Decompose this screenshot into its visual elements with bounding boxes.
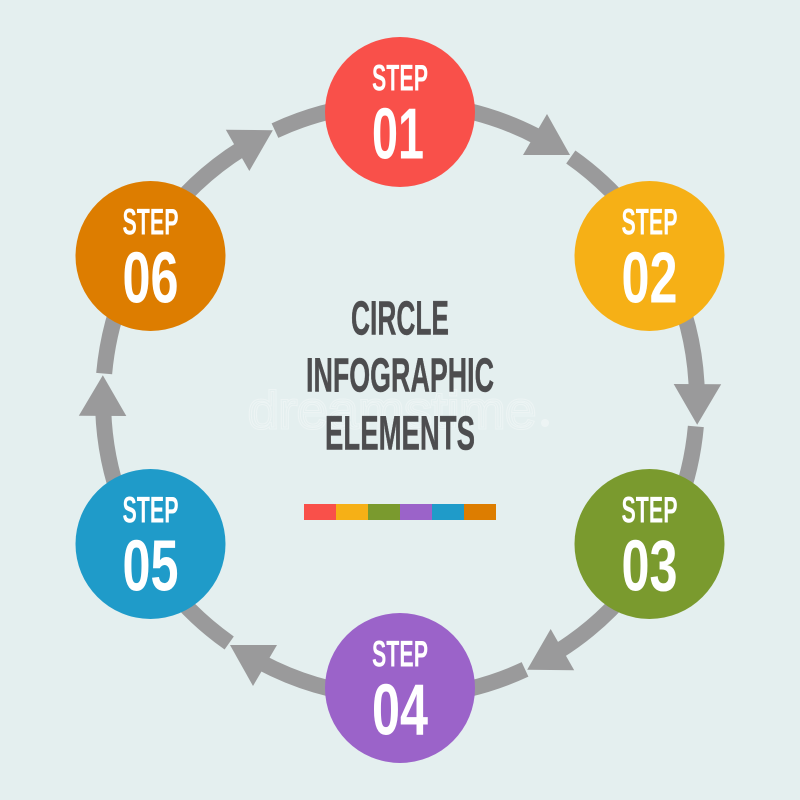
step 05 badge: STEP xyxy=(122,490,178,530)
step 04 badge: STEP xyxy=(372,634,428,674)
title: INFOGRAPHIC xyxy=(306,350,494,402)
step 04 badge: 04 xyxy=(372,670,428,750)
step 03 badge xyxy=(574,469,724,619)
colour legend bar xyxy=(304,504,496,520)
title xyxy=(306,292,494,460)
arrow: step 2 to step 3 xyxy=(561,274,778,526)
step 03 badge: 03 xyxy=(622,526,678,606)
step 03 badge: STEP xyxy=(622,490,678,530)
arrow: step 3 to step 4 xyxy=(426,508,643,759)
arrow: step 1 to step 2 xyxy=(426,104,643,230)
arrow: step 5 to step 6 xyxy=(22,274,239,526)
step 02 badge: STEP xyxy=(622,202,678,242)
arrow: step 4 to step 5 xyxy=(157,570,374,696)
step 05 badge: 05 xyxy=(122,526,178,606)
step 05 badge xyxy=(76,469,226,619)
title: CIRCLE xyxy=(351,292,449,346)
step 01 badge: 01 xyxy=(372,94,424,174)
watermark: dreamstime xyxy=(248,382,536,440)
step 06 badge: STEP xyxy=(122,202,178,242)
watermark: dreamstime xyxy=(248,382,536,440)
step 04 badge xyxy=(325,613,475,763)
step 01 badge xyxy=(325,37,475,187)
arrow: step 6 to step 1 xyxy=(157,41,374,292)
step 06 badge: 06 xyxy=(122,238,178,318)
step 06 badge xyxy=(76,181,226,331)
step 02 badge xyxy=(574,181,724,331)
step 02 badge: 02 xyxy=(622,238,678,318)
title: ELEMENTS xyxy=(325,408,475,460)
step 01 badge: STEP xyxy=(372,58,428,98)
